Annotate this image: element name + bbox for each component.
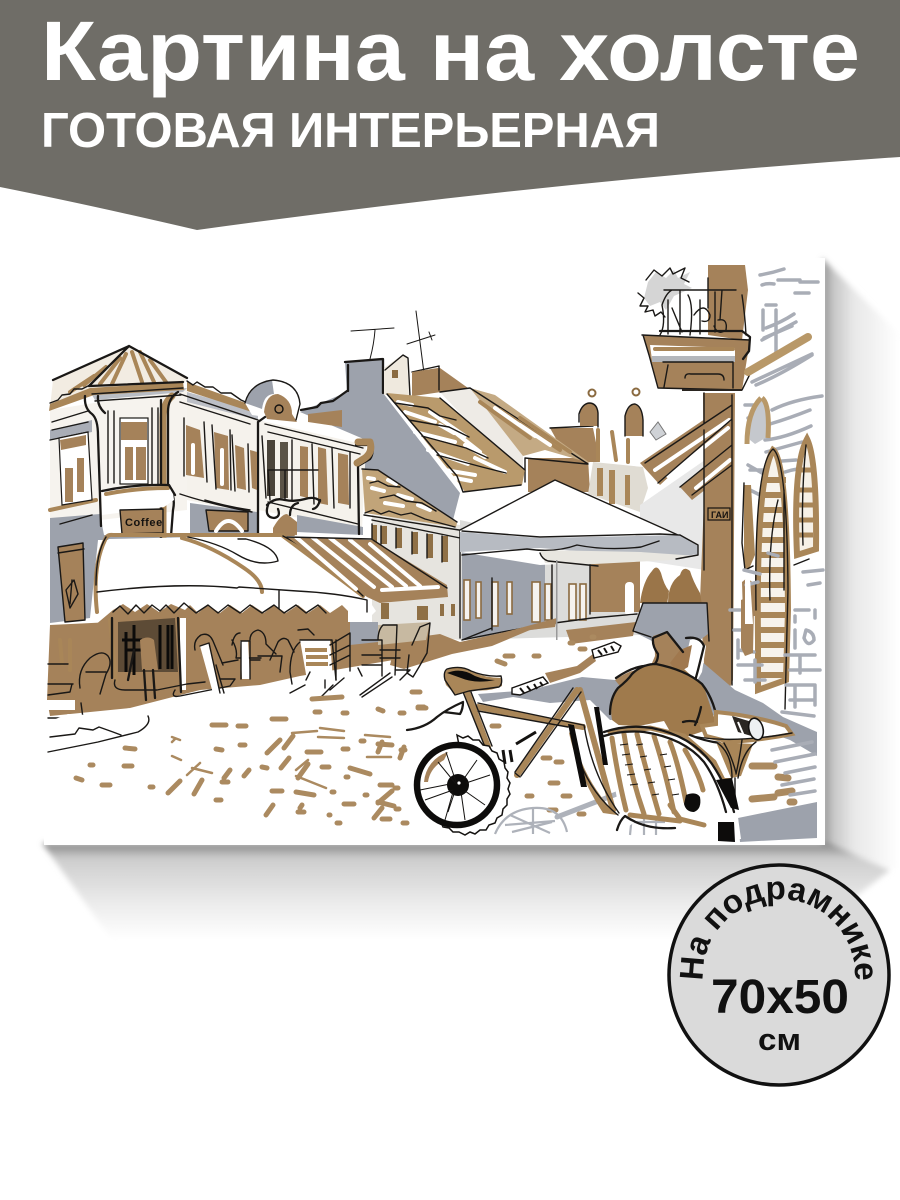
size figure: 70x50: [711, 971, 849, 1024]
canvas drop shadow: [42, 258, 900, 940]
front wheel: [417, 735, 510, 835]
seated man: [610, 632, 720, 743]
door: [58, 543, 85, 622]
small turrets: [580, 403, 643, 436]
awning one: white: [88, 535, 376, 631]
bay balcony ledge: [102, 486, 174, 515]
curved caption: На подрамнике: [680, 881, 873, 980]
antennas: [351, 311, 435, 381]
street shadow strip: [390, 618, 557, 669]
frame: [467, 690, 613, 810]
cornice lines: [50, 388, 363, 454]
background far buildings: [372, 366, 705, 640]
subtitle: ГОТОВАЯ ИНТЕРЬЕРНАЯ: [41, 104, 660, 158]
canvas surface: [44, 258, 825, 845]
right tower and balcony: ГАИ: [711, 510, 729, 520]
sign panel: lunette: [206, 510, 248, 531]
cafe table with can: [692, 712, 792, 838]
tall arched window: [758, 450, 788, 690]
balcony plant and railing: [638, 268, 746, 335]
right tower and balcony: [640, 265, 752, 692]
window: central: [108, 408, 158, 484]
mid building outline and far arcade: [364, 515, 637, 640]
canvas painting: city street sketch: [44, 258, 825, 845]
downpipes: [85, 396, 105, 526]
grey gable wall with chimney: [300, 355, 460, 520]
right oval window: [796, 439, 816, 555]
brickwork: [730, 610, 820, 716]
sign panel: coffee: [120, 509, 163, 534]
grey pavement shadow: [478, 660, 817, 842]
size badge: [667, 863, 891, 1087]
saddle: [444, 668, 502, 695]
patio umbrella: [460, 480, 698, 640]
unit: см: [758, 1022, 801, 1057]
windows: middle wing: [184, 418, 257, 492]
mid facade windows: [372, 525, 455, 620]
handlebar: [545, 654, 596, 683]
second tiled roof: [362, 469, 457, 527]
grey plinth: [50, 503, 257, 623]
awning two: striped: [287, 537, 448, 603]
roof: [50, 346, 187, 408]
top banner: [0, 0, 900, 230]
brown cobblestones: [76, 637, 794, 823]
ground floor cafe: [47, 618, 430, 753]
title: Картина на холсте: [41, 4, 860, 98]
window: left: [59, 432, 92, 505]
cafe patrons and chairs: [195, 623, 430, 700]
right sketched wall: [730, 269, 823, 716]
narrow window: [744, 485, 755, 569]
left corner building: [49, 346, 373, 623]
windows: right wing: [262, 436, 350, 508]
black struts: [568, 707, 608, 787]
distant figures at table: [633, 567, 709, 655]
wicker chair: [604, 725, 741, 842]
dome and scroll: [245, 380, 300, 422]
wrought balcony bracket: [267, 498, 320, 518]
tiled roof centre: [387, 393, 525, 492]
sign panel: coffee: Coffee: [125, 517, 163, 529]
bicycle: [407, 642, 621, 835]
pedal arm: [407, 702, 463, 730]
